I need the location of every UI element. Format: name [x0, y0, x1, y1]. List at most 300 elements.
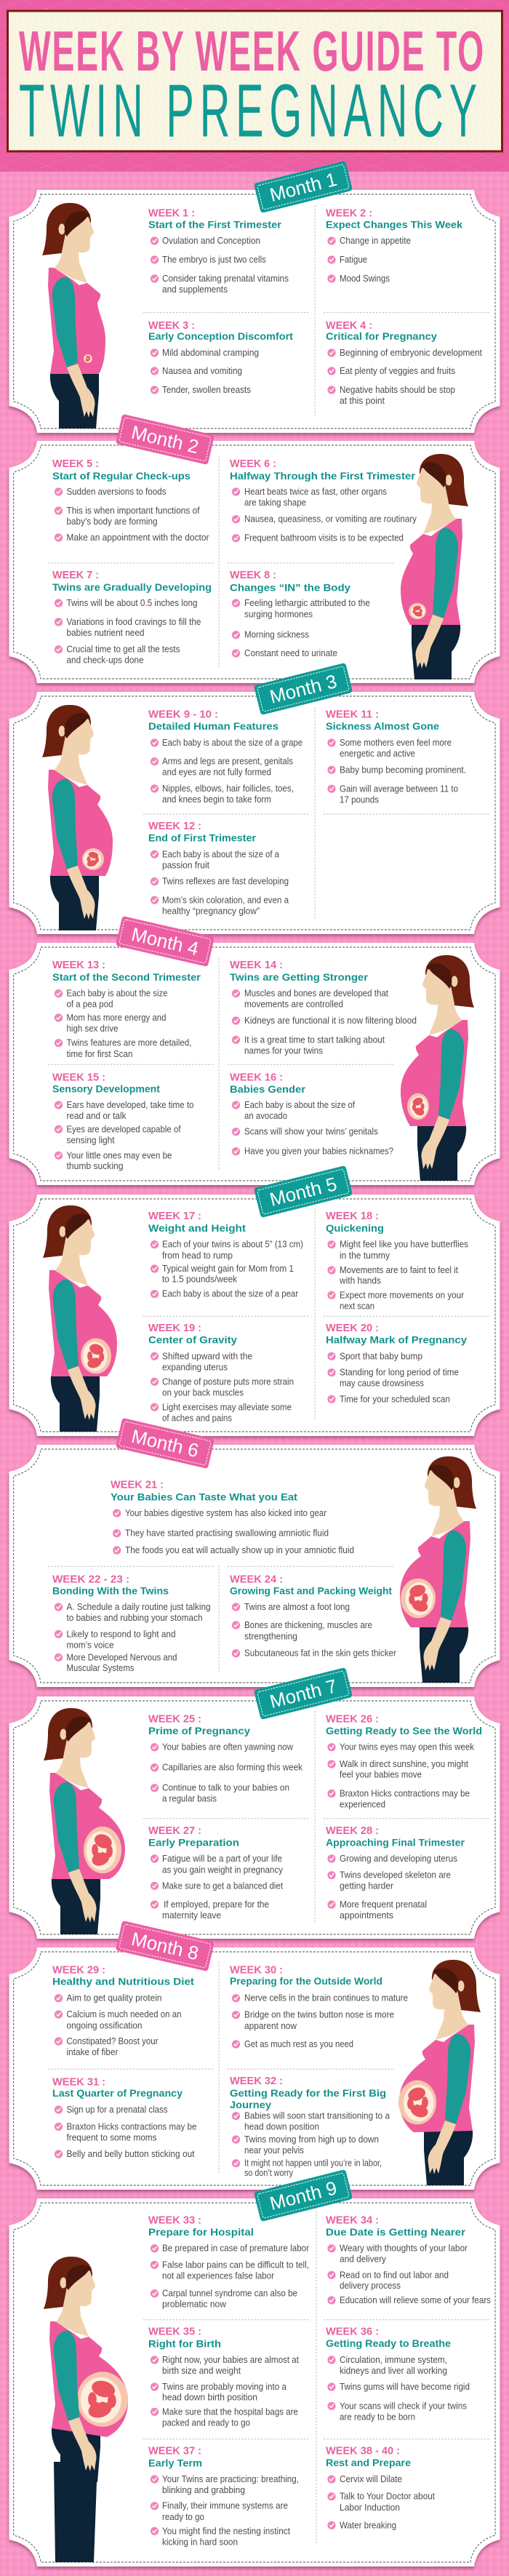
week 9-10: WEEK 9 - 10 :: [148, 709, 218, 721]
week 19: [148, 1322, 294, 1423]
week 32: so don’t worry: [244, 2168, 294, 2178]
week 12: passion fruit: [162, 860, 209, 870]
week 35: WEEK 35 :: [148, 2326, 201, 2338]
week 36: WEEK 36 :: [326, 2326, 379, 2338]
week 4: Critical for Pregnancy: [326, 330, 437, 342]
week 9-10: Nipples, elbows, hair follicles, toes,: [162, 783, 294, 794]
week 11: 17 pounds: [340, 795, 379, 805]
week 1: [148, 207, 289, 295]
week 11: energetic and active: [340, 749, 415, 759]
week 12: healthy “pregnancy glow”: [162, 906, 260, 917]
week 35: head down birth position: [162, 2393, 257, 2403]
tag: month 6: Month 6: [129, 1425, 201, 1462]
week 2: [326, 207, 462, 284]
week 11: Sickness Almost Gone: [326, 720, 439, 732]
week 9-10: and eyes are not fully formed: [162, 767, 271, 777]
week 28: Approaching Final Trimester: [326, 1836, 465, 1848]
figure: month 2: [401, 454, 468, 679]
week 31: Braxton Hicks contractions may be: [67, 2121, 197, 2132]
week 25: Capillaries are also forming this week: [162, 1763, 303, 1773]
week 11: Baby bump becoming prominent.: [340, 765, 466, 775]
week 16: Babies Gender: [230, 1083, 306, 1095]
week 18: Quickening: [326, 1222, 384, 1234]
week 22-23: Muscular Systems: [67, 1663, 134, 1673]
week 24: [230, 1573, 396, 1659]
week 22-23: Bonding With the Twins: [52, 1584, 169, 1596]
week 24: Twins are almost a foot long: [244, 1602, 350, 1612]
panel: month 3: [9, 663, 500, 934]
week 27: Make sure to get a balanced diet: [162, 1881, 283, 1891]
week 9-10: Arms and legs are present, genitals: [162, 757, 293, 767]
week 37: WEEK 37 :: [148, 2445, 201, 2457]
week 12: Mom’s skin coloration, and even a: [162, 895, 289, 905]
week 17: Each baby is about the size of a pear: [162, 1289, 298, 1299]
week 22-23: to babies and rubbing your stomach: [67, 1613, 203, 1623]
week 6: Frequent bathroom visits is to be expected: [244, 533, 404, 543]
week 33: not all experiences false labor: [162, 2271, 274, 2281]
week 16: WEEK 16 :: [230, 1072, 283, 1084]
week 21: Your babies digestive system has also kicked into gear: [125, 1508, 326, 1518]
week 8: Constant need to urinate: [244, 648, 337, 658]
week 11: Some mothers even feel more: [340, 738, 452, 748]
week 7: Variations in food cravings to fill the: [67, 617, 201, 627]
week 7: and check-ups done: [67, 655, 144, 666]
week 32: WEEK 32 :: [230, 2075, 283, 2087]
figure: month 3: [42, 705, 113, 930]
week 13: [52, 959, 201, 1059]
week 22-23: [52, 1573, 211, 1673]
tag: month 9: [254, 2169, 353, 2222]
tag: month 4: Month 4: [129, 923, 201, 960]
week 28: [326, 1825, 465, 1921]
week 13: time for first Scan: [67, 1049, 133, 1059]
week 37: [148, 2445, 299, 2547]
week 33: Prepare for Hospital: [148, 2226, 254, 2238]
week 26: experienced: [340, 1799, 385, 1809]
week 1: The embryo is just two cells: [162, 255, 266, 265]
week 32: Twins moving from high up to down: [244, 2134, 379, 2145]
week 36: Your scans will check if your twins: [340, 2401, 467, 2411]
week 12: Each baby is about the size of a: [162, 849, 279, 859]
figure: month 7: [44, 1708, 125, 1934]
figure: month 4: [401, 955, 474, 1181]
week 26: Getting Ready to See the World: [326, 1725, 482, 1736]
week 36: Twins gums will have become rigid: [340, 2382, 470, 2392]
week 8: Feeling lethargic attributed to the: [244, 598, 370, 608]
week 33: problematic now: [162, 2300, 227, 2310]
week 14: movements are controlled: [244, 1000, 343, 1010]
week 12: Twins reflexes are fast developing: [162, 877, 289, 887]
week 16: an avocado: [244, 1111, 287, 1121]
tag: month 7: [254, 1667, 353, 1720]
week 17: from head to rump: [162, 1251, 233, 1261]
week 24: strengthening: [244, 1631, 297, 1641]
week 6: Halfway Through the First Trimester: [230, 470, 416, 482]
figure: month 1: [42, 203, 105, 428]
week 35: Twins are probably moving into a: [162, 2382, 286, 2392]
week 29: ongoing ossification: [67, 2020, 143, 2030]
week 8: WEEK 8 :: [230, 569, 276, 581]
week 3: Early Conception Discomfort: [148, 330, 293, 342]
week 13: of a pea pod: [67, 1000, 113, 1010]
tag: month 9: Month 9: [268, 2177, 339, 2214]
week 20: WEEK 20 :: [326, 1322, 379, 1334]
week 8: Morning sickness: [244, 630, 309, 640]
week 15: thumb sucking: [67, 1161, 124, 1171]
week 33: [148, 2214, 309, 2310]
week 22-23: mom’s voice: [67, 1640, 114, 1651]
week 13: Start of the Second Trimester: [52, 971, 201, 983]
week 4: WEEK 4 :: [326, 319, 372, 332]
week 31: Last Quarter of Pregnancy: [52, 2087, 183, 2099]
tag: month 3: [254, 663, 353, 715]
week 18: Might feel like you have butterflies: [340, 1240, 468, 1250]
week 3: [148, 319, 293, 395]
week 34: Education will relieve some of your fears: [340, 2295, 491, 2305]
figure: month 8: [398, 1960, 481, 2185]
week 15: Sensory Development: [52, 1082, 160, 1094]
week 12: End of First Trimester: [148, 832, 257, 844]
panel: month 1: [9, 161, 500, 433]
week 2: Fatigue: [340, 255, 367, 265]
week 29: Aim to get quality protein: [67, 1993, 162, 2003]
week 34: [326, 2214, 491, 2305]
week 37: ready to go: [162, 2512, 204, 2522]
week 35: Make sure that the hospital bags are: [162, 2406, 298, 2417]
panel: month 4: [9, 916, 500, 1185]
week 13: Mom has more energy and: [67, 1013, 167, 1023]
panel: month 6: [9, 1418, 500, 1687]
week 8: surging hormones: [244, 610, 313, 620]
week 5: [52, 458, 209, 543]
week 37: Early Term: [148, 2457, 202, 2468]
week 38-40: Talk to Your Doctor about: [340, 2492, 435, 2502]
week 38-40: Labor Induction: [340, 2503, 400, 2513]
week 25: Your babies are often yawning now: [162, 1742, 294, 1752]
week 36: are ready to be born: [340, 2412, 415, 2422]
week 18: Movements are to faint to feel it: [340, 1265, 458, 1275]
week 2: Change in appetite: [340, 236, 411, 246]
figure: month 6: [400, 1456, 476, 1683]
week 8: Changes “IN” the Body: [230, 582, 350, 594]
week 31: Belly and belly button sticking out: [67, 2149, 195, 2159]
week 17: to 1.5 pounds/week: [162, 1275, 238, 1285]
week 29: Calcium is much needed on an: [67, 2009, 182, 2019]
week 35: packed and ready to go: [162, 2417, 250, 2428]
week 1: Consider taking prenatal vitamins: [162, 274, 289, 284]
week 15: Ears have developed, take time to: [67, 1100, 194, 1110]
week 32: near your pelvis: [244, 2145, 304, 2156]
week 15: [52, 1072, 194, 1171]
week 6: Nausea, queasiness, or vomiting are routinary: [244, 514, 417, 525]
week 28: More frequent prenatal: [340, 1899, 427, 1910]
tag: month 1: [254, 161, 353, 213]
week 4: [326, 319, 482, 406]
week 9-10: Detailed Human Features: [148, 720, 278, 732]
week 22-23: WEEK 22 - 23 :: [52, 1573, 129, 1585]
week 20: Time for your scheduled scan: [340, 1394, 450, 1404]
week 34: and delivery: [340, 2254, 387, 2265]
week 34: Read on to find out labor and: [340, 2270, 449, 2280]
week 30: [230, 1963, 408, 2049]
week 38-40: Water breaking: [340, 2520, 396, 2530]
tag: month 5: [254, 1165, 353, 1218]
week 32: [230, 2075, 390, 2178]
week 33: Be prepared in case of premature labor: [162, 2244, 309, 2254]
week 22-23: A. Schedule a daily routine just talking: [67, 1602, 211, 1612]
week 5: Sudden aversions to foods: [67, 487, 166, 497]
week 1: and supplements: [162, 284, 228, 295]
week 28: Twins developed skeleton are: [340, 1870, 451, 1881]
week 14: Twins are Getting Stronger: [230, 971, 369, 983]
week 37: Your Twins are practicing: breathing,: [162, 2474, 299, 2484]
week 16: Each baby is about the size of: [244, 1100, 355, 1110]
week 24: Subcutaneous fat in the skin gets thicker: [244, 1648, 396, 1659]
week 6: are taking shape: [244, 498, 306, 508]
week 37: blinking and grabbing: [162, 2485, 245, 2495]
week 24: WEEK 24 :: [230, 1573, 283, 1585]
week 3: WEEK 3 :: [148, 319, 195, 332]
week 19: Center of Gravity: [148, 1334, 237, 1346]
week 25: Continue to talk to your babies on: [162, 1783, 289, 1793]
week 1: WEEK 1 :: [148, 207, 195, 220]
tag: month 2: Month 2: [129, 421, 201, 458]
week 33: False labor pains can be difficult to tell,: [162, 2260, 309, 2270]
week 27: WEEK 27 :: [148, 1825, 201, 1837]
week 26: feel your babies move: [340, 1770, 422, 1780]
week 37: You might find the nesting instinct: [162, 2526, 290, 2536]
week 19: expanding uterus: [162, 1363, 228, 1373]
figure: month 9: [44, 2257, 128, 2562]
week 15: read and or talk: [67, 1111, 127, 1121]
week 16: Scans will show your twins’ genitals: [244, 1127, 378, 1137]
week 27: Fatigue will be a part of your life: [162, 1854, 282, 1864]
week 26: Your twins eyes may open this week: [340, 1742, 475, 1752]
week 20: [326, 1322, 467, 1404]
week 12: [148, 820, 289, 917]
week 31: frequent to some moms: [67, 2132, 157, 2142]
week 13: Each baby is about the size: [67, 989, 168, 999]
week 11: WEEK 11 :: [326, 709, 379, 721]
week 14: names for your twins: [244, 1045, 323, 1056]
week 26: WEEK 26 :: [326, 1712, 379, 1725]
week 19: on your back muscles: [162, 1387, 244, 1397]
week 31: WEEK 31 :: [52, 2075, 105, 2088]
week 36: Getting Ready to Breathe: [326, 2337, 451, 2349]
week 17: [148, 1210, 303, 1299]
week 1: Ovulation and Conception: [162, 236, 260, 246]
week 19: of aches and pains: [162, 1413, 232, 1423]
panel: month 9: [9, 2169, 500, 2567]
week 33: Carpal tunnel syndrome can also be: [162, 2289, 297, 2299]
week 37: kicking in hard soon: [162, 2537, 238, 2547]
week 20: Standing for long period of time: [340, 1368, 459, 1378]
week 18: in the tummy: [340, 1251, 390, 1261]
week 25: Prime of Pregnancy: [148, 1725, 250, 1736]
week 15: Eyes are developed capable of: [67, 1124, 181, 1134]
figure: month 5: [43, 1205, 117, 1432]
week 18: next scan: [340, 1301, 374, 1312]
week 28: appointments: [340, 1910, 393, 1921]
week 29: [52, 1963, 194, 2057]
week 11: Gain will average between 11 to: [340, 783, 458, 794]
week 37: Finally, their immune systems are: [162, 2501, 288, 2511]
week 17: Weight and Height: [148, 1222, 246, 1234]
week 35: birth size and weight: [162, 2366, 241, 2376]
week 36: kidneys and liver all working: [340, 2366, 447, 2376]
week 18: [326, 1210, 468, 1312]
week 12: WEEK 12 :: [148, 820, 201, 832]
week 15: Your little ones may even be: [67, 1150, 172, 1160]
tag: month 2: [116, 414, 215, 465]
week 2: WEEK 2 :: [326, 207, 372, 220]
week 18: Expect more movements on your: [340, 1290, 464, 1300]
week 7: Twins are Gradually Developing: [52, 581, 212, 593]
week 22-23: Likely to respond to light and: [67, 1629, 176, 1639]
week 4: Beginning of embryonic development: [340, 348, 482, 358]
title: [19, 19, 485, 153]
panel: month 2: [9, 414, 500, 683]
week 25: WEEK 25 :: [148, 1712, 201, 1725]
week 7: babies nutrient need: [67, 628, 145, 638]
week 28: WEEK 28 :: [326, 1825, 379, 1837]
tag: month 4: [116, 916, 215, 967]
week 35: [148, 2326, 299, 2428]
week 38-40: Cervix will Dilate: [340, 2474, 402, 2484]
week 17: Typical weight gain for Mom from 1: [162, 1264, 294, 1274]
week 38-40: [326, 2445, 435, 2530]
week 13: Twins features are more detailed,: [67, 1038, 192, 1048]
week 26: Braxton Hicks contractions may be: [340, 1788, 470, 1798]
week 38-40: Rest and Prepare: [326, 2457, 411, 2468]
week 5: This is when important functions of: [67, 506, 200, 516]
week 30: Preparing for the Outside World: [230, 1975, 382, 1987]
week 18: with hands: [339, 1276, 381, 1286]
week 29: Healthy and Nutritious Diet: [52, 1976, 194, 1987]
week 7: [52, 569, 212, 666]
week 29: WEEK 29 :: [52, 1963, 105, 1976]
week 24: Bones are thickening, muscles are: [244, 1620, 372, 1630]
week 35: Right now, your babies are almost at: [162, 2355, 299, 2365]
week 19: WEEK 19 :: [148, 1322, 201, 1334]
week 17: Each of your twins is about 5” (13 cm): [162, 1240, 303, 1250]
week 27: If employed, prepare for the: [164, 1899, 269, 1910]
week 33: WEEK 33 :: [148, 2214, 201, 2226]
week 3: Mild abdominal cramping: [162, 348, 259, 358]
week 7: WEEK 7 :: [52, 569, 99, 581]
week 36: Circulation, immune system,: [340, 2355, 447, 2365]
week 5: WEEK 5 :: [52, 458, 99, 470]
week 7: Crucial time to get all the tests: [67, 645, 180, 655]
panel: month 8: [9, 1921, 500, 2190]
week 29: Constipated? Boost your: [67, 2036, 159, 2046]
tag: month 5: Month 5: [268, 1173, 339, 1211]
week 32: Journey: [230, 2099, 271, 2110]
header band: [0, 0, 509, 172]
tag: month 8: [116, 1921, 215, 1971]
tag: month 6: [116, 1418, 215, 1469]
week 13: high sex drive: [67, 1024, 119, 1034]
week 27: [148, 1825, 284, 1921]
week 2: Mood Swings: [340, 274, 390, 284]
week 25: a regular basis: [162, 1794, 217, 1804]
tag: month 7: Month 7: [268, 1675, 339, 1712]
week 34: delivery process: [340, 2281, 401, 2291]
week 27: maternity leave: [162, 1910, 221, 1921]
panel: month 7: [9, 1667, 500, 1939]
week 34: Weary with thoughts of your labor: [340, 2244, 468, 2254]
week 19: Shifted upward with the: [162, 1351, 252, 1361]
week 4: Negative habits should be stop: [340, 385, 455, 395]
week 31: [52, 2075, 197, 2159]
week 19: Change of posture puts more strain: [162, 1376, 294, 1387]
week 30: WEEK 30 :: [230, 1963, 283, 1976]
week 32: Babies will soon start transitioning to a: [244, 2111, 390, 2121]
week 3: Nausea and vomiting: [162, 366, 242, 376]
week 30: Nerve cells in the brain continues to mature: [244, 1993, 408, 2003]
panel: month 5: [9, 1165, 500, 1436]
week 3: Tender, swollen breasts: [162, 385, 251, 395]
week 21: The foods you eat will actually show up in your amniotic fluid: [125, 1545, 354, 1555]
week 35: Right for Birth: [148, 2337, 221, 2349]
week 27: as you gain weight in pregnancy: [162, 1865, 284, 1875]
week 21: They have started practising swallowing amniotic fluid: [125, 1528, 329, 1539]
week 21: Your Babies Can Taste What you Eat: [111, 1491, 297, 1503]
week 4: Eat plenty of veggies and fruits: [340, 366, 455, 376]
week 9-10: and knees begin to take form: [162, 794, 271, 805]
week 15: WEEK 15 :: [52, 1072, 105, 1084]
week 22-23: More Developed Nervous and: [67, 1652, 177, 1662]
week 6: WEEK 6 :: [230, 458, 276, 470]
week 21: WEEK 21 :: [111, 1479, 164, 1491]
week 16: Have you given your babies nicknames?: [244, 1147, 393, 1157]
week 27: Early Preparation: [148, 1836, 239, 1848]
week 5: Make an appointment with the doctor: [67, 533, 209, 543]
week 36: [326, 2326, 470, 2422]
week 18: WEEK 18 :: [326, 1210, 379, 1222]
week 25: [148, 1712, 303, 1804]
week 5: Start of Regular Check-ups: [52, 470, 191, 482]
week 34: Due Date is Getting Nearer: [326, 2226, 466, 2238]
tag: month 3: Month 3: [268, 670, 339, 708]
tag: month 1: Month 1: [268, 168, 339, 206]
week 9-10: Each baby is about the size of a grape: [162, 738, 302, 748]
week 6: Heart beats twice as fast, other organs: [244, 487, 387, 497]
title box: [7, 11, 502, 151]
week 31: Sign up for a prenatal class: [67, 2105, 167, 2115]
week 34: WEEK 34 :: [326, 2214, 379, 2226]
week 14: Kidneys are functional it is now filtering blood: [244, 1016, 417, 1026]
week 20: Halfway Mark of Pregnancy: [326, 1334, 467, 1346]
week 28: getting harder: [340, 1881, 393, 1891]
week 15: sensing light: [67, 1135, 115, 1145]
week 14: Muscles and bones are developed that: [244, 989, 388, 999]
week 8: [230, 569, 370, 658]
week 6: [230, 458, 417, 543]
week 29: intake of fiber: [67, 2047, 118, 2057]
week 1: Start of the First Trimester: [148, 218, 282, 230]
week 21: [111, 1479, 354, 1555]
week 7: Twins will be about 0.5 inches long: [67, 598, 198, 608]
week 20: Sport that baby bump: [340, 1351, 422, 1361]
week 32: It might not happen until you’re in labor,: [244, 2158, 382, 2169]
week 5: baby’s body are forming: [67, 517, 158, 527]
week 17: WEEK 17 :: [148, 1210, 201, 1222]
tag: month 8: Month 8: [129, 1928, 201, 1964]
week 14: WEEK 14 :: [230, 959, 283, 971]
week 30: Get as much rest as you need: [244, 2039, 353, 2049]
week 30: apparent now: [244, 2021, 297, 2031]
